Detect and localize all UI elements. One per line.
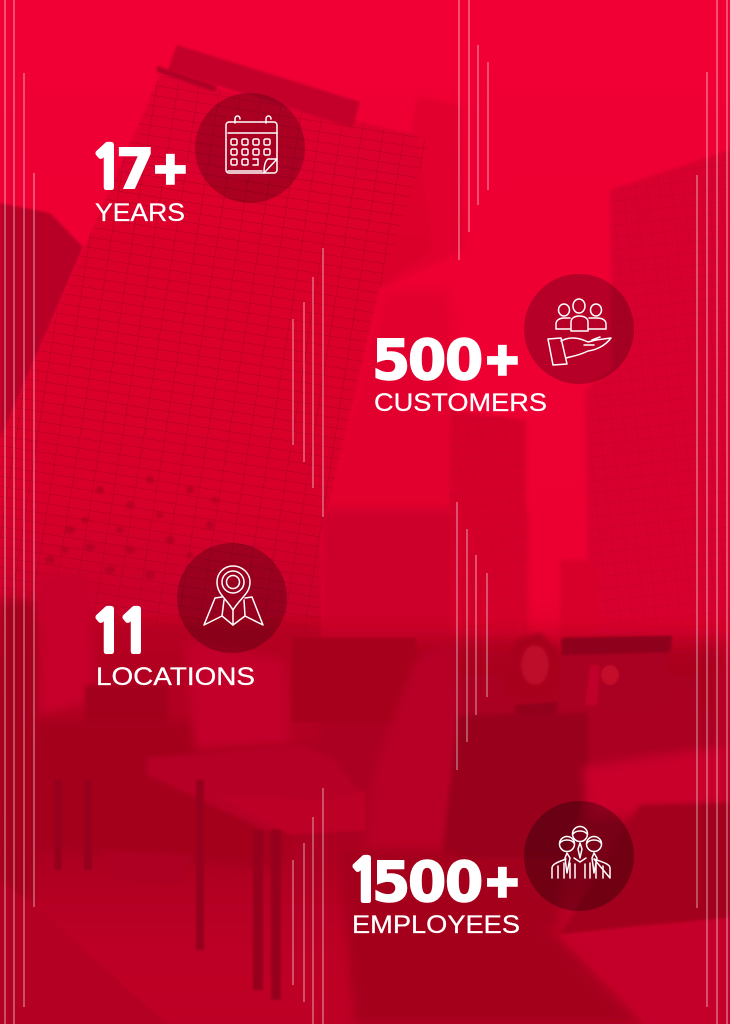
icon circle: map pin	[177, 543, 287, 653]
number: 1500+: 1	[347, 852, 382, 910]
icon circle: calendar	[195, 93, 305, 203]
icon circle: team of employees	[524, 801, 634, 911]
label: CUSTOMERS: CUSTOMERS	[374, 389, 547, 417]
number: 11: 1	[117, 603, 152, 661]
number: 17+: 1	[90, 139, 125, 197]
office floor and furniture	[0, 640, 730, 1024]
stat: years	[90, 93, 305, 227]
icon circle: hand holding people	[524, 274, 634, 384]
number: 500+: 5	[372, 328, 410, 392]
number: 11: 1	[90, 603, 125, 661]
number: 17+: 7	[116, 137, 154, 201]
number: 1500+: 0	[408, 850, 446, 914]
stat: customers	[372, 274, 634, 417]
stat: employees	[347, 801, 634, 939]
label: EMPLOYEES: EMPLOYEES	[352, 911, 520, 939]
number: 500+: 0	[408, 328, 446, 392]
number: 1500+: +	[486, 850, 519, 913]
number: 1500+: 0	[445, 850, 483, 914]
stat: locations	[90, 543, 287, 691]
number: 1500+: 5	[372, 850, 410, 914]
number: 500+: +	[486, 328, 519, 391]
label: LOCATIONS: LOCATIONS	[96, 663, 255, 691]
number: 500+: 0	[445, 328, 483, 392]
label: YEARS: YEARS	[95, 199, 185, 227]
number: 17+: +	[154, 137, 187, 200]
